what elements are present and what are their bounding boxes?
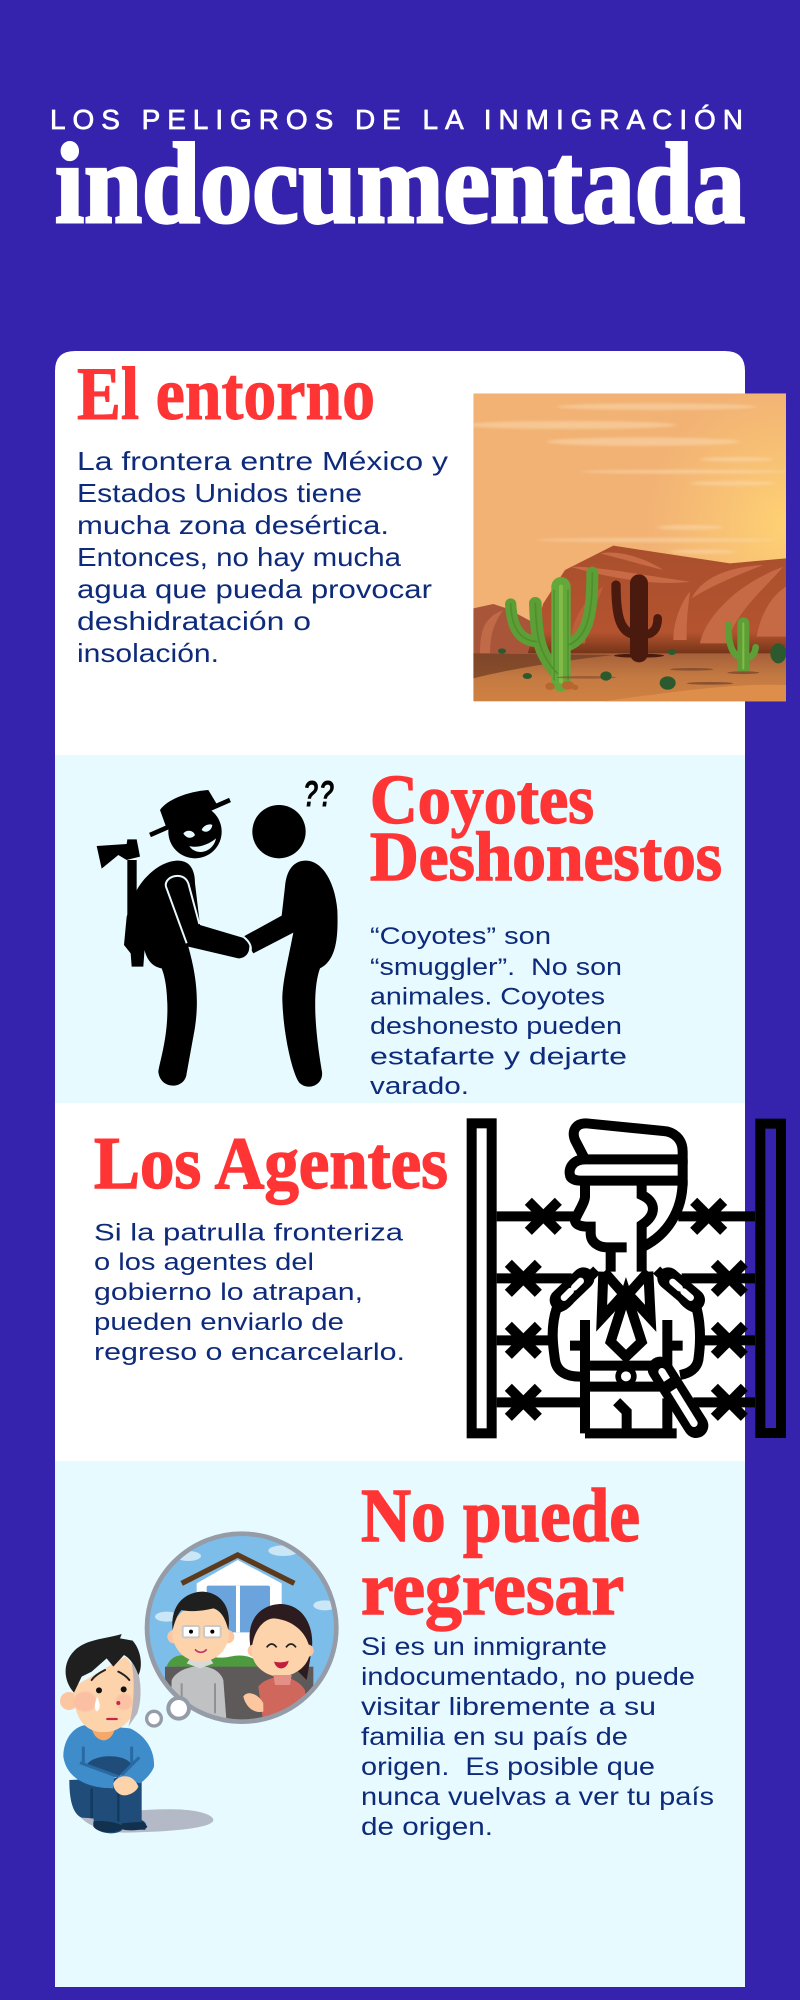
panel: El entorno: [55, 351, 793, 755]
text block: Los Agentes: gobierno lo atrapan,: [94, 1279, 363, 1306]
text block: No puede regresar: indocumentado, no puede: [361, 1663, 695, 1691]
text block: El entorno: Entonces, no hay mucha: [77, 542, 402, 572]
heading: No puede regresar: [361, 1474, 640, 1631]
illustration: desert: [463, 393, 793, 701]
text block: No puede regresar: de origen.: [361, 1813, 493, 1841]
illustration: sad man thinking of family: [60, 1534, 337, 1833]
text block: Coyotes: “Coyotes” son: [370, 923, 551, 950]
text block: Coyotes: “smuggler”. No son: [370, 954, 622, 981]
heading: Los Agentes: Los Agentes: [94, 1123, 448, 1205]
heading: Coyotes Deshonestos: [370, 762, 722, 896]
heading: No puede regresar: No puede: [361, 1474, 640, 1558]
title main word: indocumentada: [55, 120, 745, 247]
text block: No puede regresar: visitar libremente a su: [361, 1693, 656, 1721]
text block: El entorno: deshidratación o: [77, 606, 311, 636]
heading: Coyotes Deshonestos: Deshonestos: [370, 819, 722, 896]
sad man: [60, 1634, 213, 1833]
panel: Los Agentes: [55, 1103, 781, 1461]
small cactus: [728, 623, 756, 668]
text block: No puede regresar: origen. Es posible que: [361, 1753, 655, 1781]
text block: El entorno: [77, 446, 448, 668]
shrubs: [498, 643, 786, 690]
heading: El entorno: El entorno: [77, 353, 375, 436]
icon: coyote handshake: [97, 773, 338, 1087]
question marks: ??: [303, 773, 334, 815]
text block: Los Agentes: [94, 1220, 405, 1366]
text block: Coyotes: [370, 923, 627, 1100]
text block: El entorno: La frontera entre México y: [77, 446, 448, 476]
text block: El entorno: Estados Unidos tiene: [77, 478, 362, 508]
icon: officer behind barbed wire: [472, 1123, 781, 1433]
text block: Coyotes: deshonesto pueden: [370, 1013, 622, 1040]
text block: Los Agentes: pueden enviarlo de: [94, 1309, 344, 1336]
heading: No puede regresar: regresar: [361, 1547, 624, 1631]
text block: No puede regresar: familia en su país de: [361, 1723, 628, 1751]
text block: El entorno: mucha zona desértica.: [77, 510, 389, 540]
text block: Coyotes: estafarte y dejarte: [370, 1044, 627, 1070]
text block: Los Agentes: Si la patrulla fronteriza: [94, 1220, 404, 1246]
heading: Coyotes Deshonestos: Coyotes: [370, 762, 594, 839]
panel: Coyotes Deshonestos: [55, 755, 745, 1103]
text block: No puede regresar: nunca vuelvas a ver tu país: [361, 1783, 714, 1811]
text block: Los Agentes: o los agentes del: [94, 1249, 314, 1276]
text block: No puede regresar: [361, 1633, 714, 1841]
title: [50, 104, 745, 247]
title kicker: LOS PELIGROS DE LA INMIGRACIÓN: [50, 104, 743, 135]
shadow cactus: [616, 583, 658, 653]
big cactus: [511, 573, 592, 682]
text block: El entorno: agua que pueda provocar: [77, 574, 432, 604]
thought bubble: [147, 1534, 337, 1727]
panel: No puede regresar: [55, 1461, 745, 1987]
text block: Los Agentes: regreso o encarcelarlo.: [94, 1339, 405, 1366]
text block: Coyotes: varado.: [370, 1073, 469, 1100]
text block: El entorno: insolación.: [77, 638, 219, 668]
text block: Coyotes: animales. Coyotes: [370, 984, 605, 1010]
text block: No puede regresar: Si es un inmigrante: [361, 1633, 607, 1661]
